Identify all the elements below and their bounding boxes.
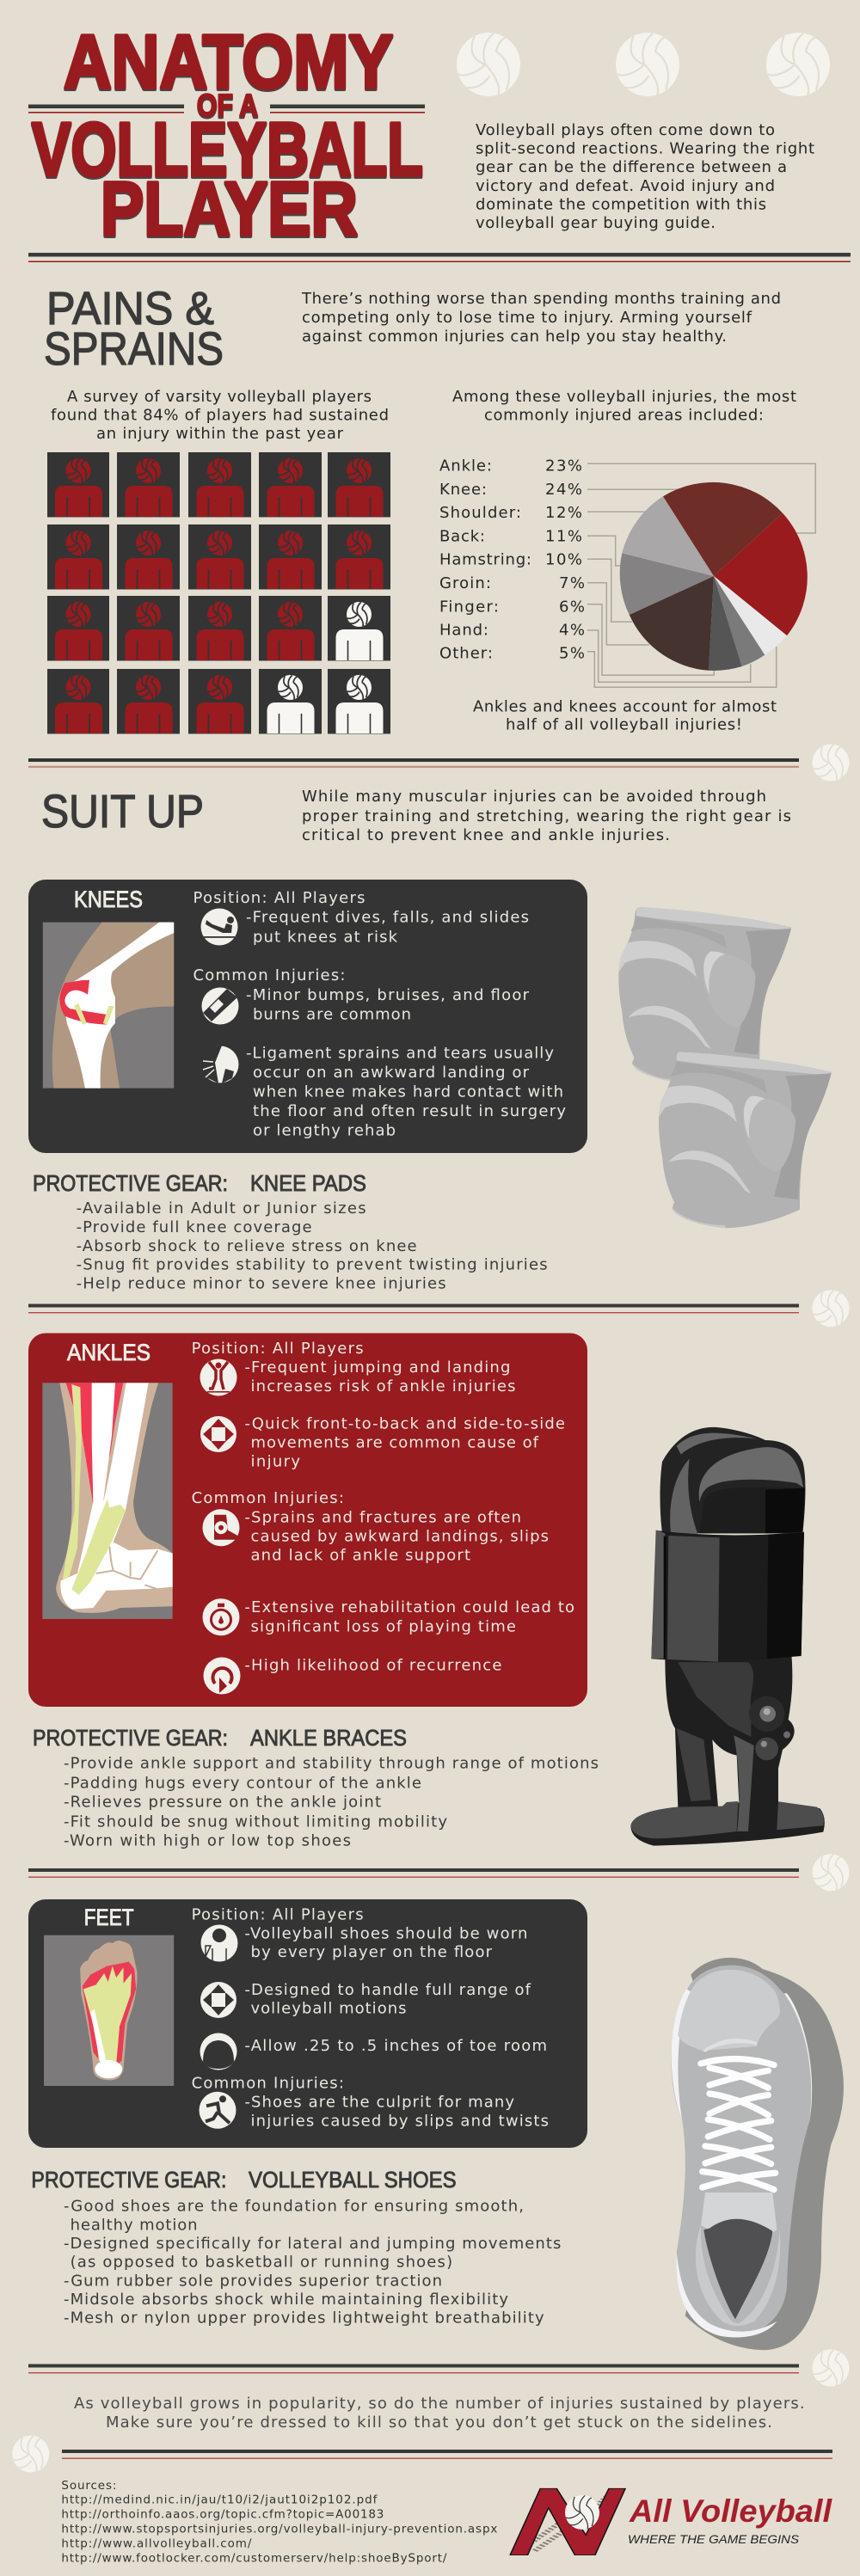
icon: directional arrows <box>200 1982 236 2018</box>
pie chart labels: 12% <box>545 504 582 522</box>
feet position text 1: by every player on the floor <box>251 1943 493 1961</box>
icon: player diving <box>201 908 237 946</box>
icon: knee impact <box>201 1046 239 1083</box>
logo: all volleyball: All Volleyball <box>629 2493 832 2529</box>
ankle braces list: -Worn with high or low top shoes <box>64 1832 351 1850</box>
intro paragraph: Volleyball plays often come down to <box>476 121 775 139</box>
closing statement <box>74 2395 805 2432</box>
sources: http://medind.nic.in/jau/t10/i2/jaut10i2p102.pdf <box>61 2493 378 2507</box>
feet position text 1 <box>244 1924 527 1961</box>
divider with volleyball <box>28 1290 850 1327</box>
ankles injuries text 1: caused by awkward landings, slips <box>251 1528 549 1546</box>
knees injuries text 2 <box>246 1045 566 1140</box>
icon: ankle target <box>203 1509 239 1546</box>
ankles position text 2: injury <box>251 1453 300 1471</box>
volleyball shoes list: -Midsole absorbs shock while maintaining flexibility <box>64 2291 508 2309</box>
pie chart takeaway: half of all volleyball injuries! <box>506 715 742 734</box>
ankle braces list: -Padding hugs every contour of the ankle <box>64 1774 421 1792</box>
knees position text: -Frequent dives, falls, and slides <box>246 909 529 927</box>
ankles injuries text 1 <box>244 1509 549 1564</box>
knees injuries text 1: burns are common <box>253 1006 411 1024</box>
divider with volleyball <box>28 1854 850 1891</box>
feet position text 1: -Volleyball shoes should be worn <box>244 1924 527 1942</box>
volleyball shoes list: healthy motion <box>71 2216 198 2234</box>
illustration: foot <box>44 1935 174 2086</box>
icon: toe room <box>200 2033 237 2070</box>
protective gear heading: knee pads: PROTECTIVE GEAR: <box>33 1170 228 1196</box>
closing statement: As volleyball grows in popularity, so do the number of injuries sustained by players. <box>74 2395 805 2413</box>
ankle braces list <box>64 1755 599 1850</box>
ankles position text 2: -Quick front-to-back and side-to-side <box>244 1415 565 1433</box>
panel heading: ankles: ANKLES <box>67 1340 150 1365</box>
survey text: an injury within the past year <box>96 425 344 443</box>
ankle braces list: -Provide ankle support and stability through range of motions <box>64 1755 599 1773</box>
pains paragraph: There’s nothing worse than spending months training and <box>301 290 781 308</box>
volleyball shoes list: -Designed specifically for lateral and jumping movements <box>64 2235 561 2253</box>
pie chart labels: 6% <box>559 598 585 616</box>
volleyball shoes list: (as opposed to basketball or running shoes) <box>71 2254 452 2272</box>
pains paragraph: against common injuries can help you stay healthy. <box>302 328 727 346</box>
feet position text 2: volleyball motions <box>251 2000 406 2018</box>
common injuries label: Common Injuries: <box>192 1489 344 1507</box>
title: ANATOMY <box>64 19 393 104</box>
ankles position text 1: -Frequent jumping and landing <box>244 1359 510 1377</box>
sources: http://orthoinfo.aaos.org/topic.cfm?topic=A00183 <box>61 2508 384 2522</box>
volleyball shoes list: -Mesh or nylon upper provides lightweight breathability <box>64 2309 544 2328</box>
ankles injuries text 2: -Extensive rehabilitation could lead to <box>244 1598 574 1616</box>
title: OF A <box>197 88 258 123</box>
knees injuries text 2: when knee makes hard contact with <box>253 1083 563 1101</box>
protective gear heading: volleyball shoes: PROTECTIVE GEAR: <box>31 2167 226 2193</box>
sources <box>61 2479 497 2565</box>
common injuries label: Common Injuries: <box>192 2074 344 2092</box>
knee pads list: -Snug fit provides stability to prevent twisting injuries <box>77 1256 548 1274</box>
divider with volleyball <box>12 2435 832 2473</box>
pie chart labels: 24% <box>545 481 582 499</box>
heading: suit up: SUIT UP <box>41 786 204 837</box>
pie chart labels: Shoulder: <box>439 504 521 522</box>
pie chart labels: Finger: <box>439 598 499 616</box>
position label: Position: All Players <box>192 1905 364 1923</box>
divider <box>28 253 851 262</box>
ankle braces list: -Fit should be snug without limiting mobility <box>64 1812 447 1831</box>
closing statement: Make sure you’re dressed to kill so that you don’t get stuck on the sidelines. <box>106 2413 772 2432</box>
intro paragraph: volleyball gear buying guide. <box>476 214 716 232</box>
volleyball shoes list: -Gum rubber sole provides superior traction <box>64 2272 442 2290</box>
ankles injuries text 3: -High likelihood of recurrence <box>244 1657 501 1675</box>
suit up paragraph: proper training and stretching, wearing the right gear is <box>302 807 791 825</box>
protective gear heading: volleyball shoes: VOLLEYBALL SHOES <box>249 2167 457 2193</box>
protective gear heading: ankle braces: PROTECTIVE GEAR: <box>33 1725 228 1751</box>
pie chart labels: Back: <box>439 527 485 545</box>
ankles injuries text 1: and lack of ankle support <box>251 1546 470 1564</box>
intro paragraph: gear can be the difference between a <box>476 158 787 176</box>
heading: pains and sprains: SPRAINS <box>44 323 224 375</box>
feet position text 2: -Designed to handle full range of <box>244 1981 531 1999</box>
knees injuries text 2: or lengthy rehab <box>253 1122 396 1140</box>
knees injuries text 1 <box>246 986 530 1024</box>
icon: slipping player <box>200 2092 236 2129</box>
pie chart labels: Hamstring: <box>439 551 531 569</box>
intro paragraph <box>476 121 814 232</box>
knees injuries text 2: the floor and often result in surgery <box>253 1102 566 1120</box>
pie chart labels: 23% <box>545 457 582 475</box>
injured areas intro text <box>452 388 796 425</box>
ankles position text 1: increases risk of ankle injuries <box>251 1377 516 1395</box>
feet injuries text: injuries caused by slips and twists <box>251 2112 549 2130</box>
knee pads list <box>77 1199 548 1293</box>
intro paragraph: split-second reactions. Wearing the right <box>476 139 814 158</box>
pie chart labels: Other: <box>439 645 493 663</box>
pie chart takeaway <box>473 697 777 734</box>
heading: pains and sprains: PAINS & <box>46 283 214 334</box>
protective gear heading: knee pads <box>33 1170 366 1196</box>
pains paragraph <box>301 290 781 346</box>
panel heading: knees: KNEES <box>74 886 143 912</box>
protective gear heading: knee pads: KNEE PADS <box>250 1170 366 1196</box>
panel: feet <box>28 1899 587 2148</box>
icon: directional arrows <box>200 1416 236 1452</box>
illustration: volleyball shoe <box>671 1958 844 2350</box>
title: VOLLEYBALL <box>32 107 423 192</box>
knee pads list: -Absorb shock to relieve stress on knee <box>77 1237 417 1255</box>
knees injuries text 2: occur on an awkward landing or <box>253 1064 530 1082</box>
suit up paragraph <box>302 788 791 844</box>
illustration: ankle brace <box>630 1427 825 1846</box>
ankles position text 2: movements are common cause of <box>251 1433 539 1451</box>
knees position text <box>246 909 529 947</box>
sources: http://www.allvolleyball.com/ <box>61 2536 252 2550</box>
injured areas intro text: commonly injured areas included: <box>484 406 764 425</box>
panel: knees <box>28 880 587 1153</box>
injured areas intro text: Among these volleyball injuries, the most <box>452 388 796 406</box>
volleyball shoes list <box>64 2198 561 2328</box>
logo: all volleyball: WHERE THE GAME BEGINS <box>628 2532 800 2546</box>
suit up paragraph: critical to prevent knee and ankle injuries. <box>302 826 670 844</box>
pains paragraph: competing only to lose time to injury. Arming yourself <box>302 309 752 327</box>
pie chart labels: 11% <box>545 527 582 545</box>
pie chart labels: 5% <box>559 645 585 663</box>
knee pads list: -Provide full knee coverage <box>77 1218 312 1236</box>
feet position text 3: -Allow .25 to .5 inches of toe room <box>244 2037 547 2055</box>
icon: recurrence arrow <box>203 1658 241 1694</box>
ankles injuries text 2 <box>244 1598 574 1635</box>
feet position text 2 <box>244 1981 531 2018</box>
panel heading: feet: FEET <box>84 1904 134 1930</box>
survey text <box>51 388 389 443</box>
feet injuries text: -Shoes are the culprit for many <box>244 2094 514 2112</box>
pie chart takeaway: Ankles and knees account for almost <box>473 697 777 715</box>
pie chart leader lines <box>587 463 815 687</box>
illustration: ankle joint <box>42 1383 173 1619</box>
survey text: found that 84% of players had sustained <box>51 406 389 425</box>
icon: jumping player <box>200 1359 237 1396</box>
icon: stopwatch <box>203 1598 239 1635</box>
panel: ankles <box>28 1333 587 1707</box>
intro paragraph: victory and defeat. Avoid injury and <box>476 177 775 195</box>
sources: http://www.footlocker.com/customerserv/help:shoeBySport/ <box>61 2551 447 2565</box>
pie chart labels: 7% <box>559 574 585 592</box>
knees position text: put knees at risk <box>253 929 398 947</box>
pie chart labels: 10% <box>545 551 582 569</box>
sources: http://www.stopsportsinjuries.org/volleyball-injury-prevention.aspx <box>61 2523 497 2536</box>
divider with volleyball <box>28 2349 850 2387</box>
icon: bandage <box>201 987 239 1025</box>
pie chart labels: Ankle: <box>439 457 492 475</box>
intro paragraph: dominate the competition with this <box>476 196 766 213</box>
protective gear heading: ankle braces <box>33 1725 407 1751</box>
icon: player <box>201 1924 237 1962</box>
ankles position text 2 <box>244 1415 565 1471</box>
pie chart labels <box>439 457 585 663</box>
suit up paragraph: While many muscular injuries can be avoided through <box>302 788 766 806</box>
knees injuries text 1: -Minor bumps, bruises, and floor <box>246 986 530 1004</box>
knees injuries text 2: -Ligament sprains and tears usually <box>246 1045 554 1063</box>
survey text: A survey of varsity volleyball players <box>67 388 372 406</box>
protective gear heading: ankle braces: ANKLE BRACES <box>250 1725 407 1751</box>
pie chart labels: 4% <box>559 621 585 639</box>
pie chart labels: Knee: <box>439 481 487 499</box>
knee pads list: -Help reduce minor to severe knee injuries <box>77 1275 446 1293</box>
heading: pains and sprains <box>44 283 224 375</box>
position label: Position: All Players <box>193 889 365 907</box>
common injuries label: Common Injuries: <box>193 966 346 984</box>
position label: Position: All Players <box>192 1340 364 1358</box>
ankles injuries text 1: -Sprains and fractures are often <box>244 1509 521 1527</box>
pie chart labels: Hand: <box>439 621 488 639</box>
ankle braces list: -Relieves pressure on the ankle joint <box>64 1794 381 1812</box>
volleyball shoes list: -Good shoes are the foundation for ensuring smooth, <box>64 2198 524 2216</box>
sources: Sources: <box>61 2479 116 2493</box>
protective gear heading: volleyball shoes <box>31 2167 457 2193</box>
knee pads list: -Available in Adult or Junior sizes <box>77 1199 366 1217</box>
illustration: knee pads <box>618 907 832 1228</box>
decorative volleyballs row <box>457 33 830 96</box>
ankles position text 1 <box>244 1359 516 1395</box>
illustration: knee joint <box>43 923 174 1089</box>
title <box>28 19 425 251</box>
feet injuries text <box>244 2094 549 2130</box>
title: PLAYER <box>101 166 358 251</box>
ankles injuries text 2: significant loss of playing time <box>251 1617 516 1635</box>
divider with volleyball <box>28 745 850 781</box>
pie chart: injured areas <box>620 482 808 671</box>
logo: all volleyball <box>510 2488 832 2555</box>
pictogram: 84 percent of players injured <box>47 452 390 734</box>
pie chart labels: Groin: <box>439 574 491 592</box>
